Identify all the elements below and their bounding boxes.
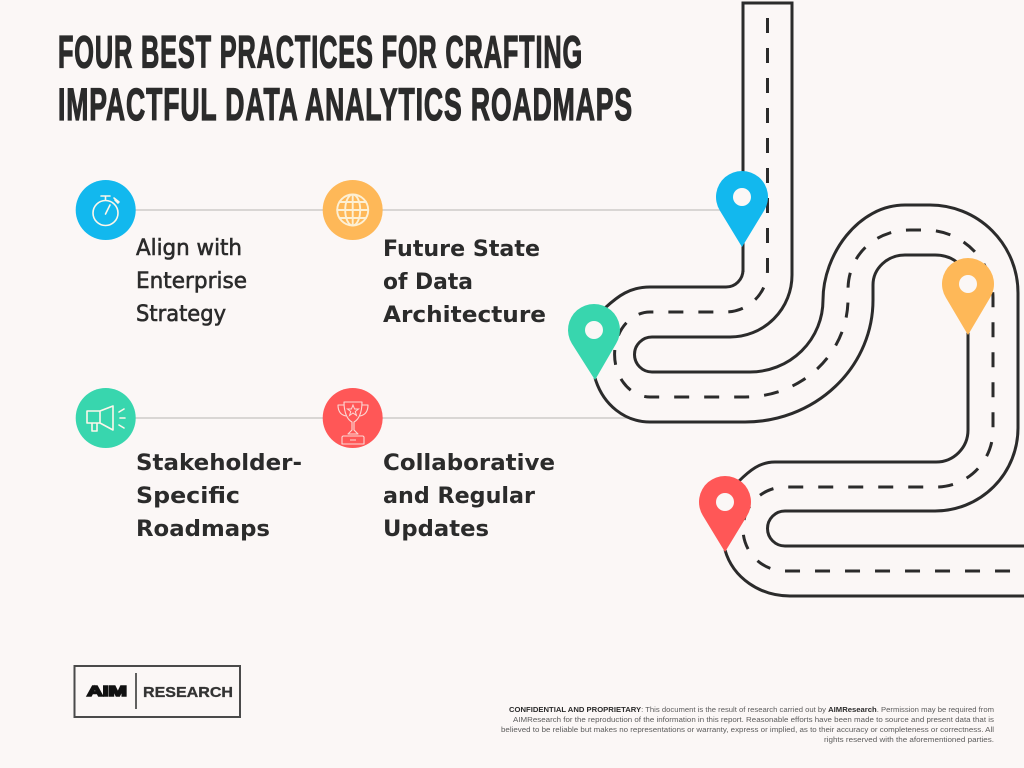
winding road [595,3,1024,596]
text: Align with Enterprise Strategy: Strategy [136,301,226,327]
disclaimer: believed to be reliable but makes no representations or warranty, express or implied, as to their accuracy or completeness or correctness. All [501,725,994,734]
text: Future State of Data Architecture: Architecture [383,302,546,328]
icon: megaphone [76,388,136,448]
text: Future State of Data Architecture: Future State [383,236,540,262]
logo: AIM Research: RESEARCH [143,685,233,701]
disclaimer [501,705,994,744]
logo: AIM Research: AIM [87,684,127,700]
text: Align with Enterprise Strategy: Enterprise [136,268,247,294]
pin: blue [716,171,768,247]
disclaimer: AIMResearch for the reproduction of the information in this report. Reasonable efforts have been made to source and present data that is [513,715,994,724]
title: FOUR BEST PRACTICES FOR CRAFTING [58,26,583,77]
title [58,26,633,130]
text: Collaborative and Regular Updates: Updates [383,516,489,542]
text: Stakeholder-Specific Roadmaps [136,450,302,542]
pin: red [699,476,751,552]
text: Collaborative and Regular Updates: and Regular [383,483,536,509]
icon: stopwatch [76,180,136,240]
disclaimer: rights reserved with the aforementioned parties. [824,735,994,744]
pin: orange [942,258,994,335]
text: Align with Enterprise Strategy: Align with [136,235,242,261]
icon: trophy [323,388,383,448]
text: Collaborative and Regular Updates [383,450,555,542]
text: Align with Enterprise Strategy [136,235,247,327]
pin: green [568,304,620,380]
text: Stakeholder-Specific Roadmaps: Roadmaps [136,516,270,542]
text: Future State of Data Architecture [383,236,546,328]
disclaimer: CONFIDENTIAL AND PROPRIETARY: This document is the result of research carried out by AIMResearch. Permission may be required from [509,705,994,714]
title: IMPACTFUL DATA ANALYTICS ROADMAPS [58,79,633,130]
text: Stakeholder-Specific Roadmaps: Stakeholder- [136,450,302,476]
icon: globe [323,180,383,240]
text: Future State of Data Architecture: of Data [383,269,473,295]
road centre dashes [615,18,1024,571]
text: Stakeholder-Specific Roadmaps: Specific [136,483,240,509]
logo: AIM Research [74,666,240,717]
text: Collaborative and Regular Updates: Collaborative [383,450,555,476]
